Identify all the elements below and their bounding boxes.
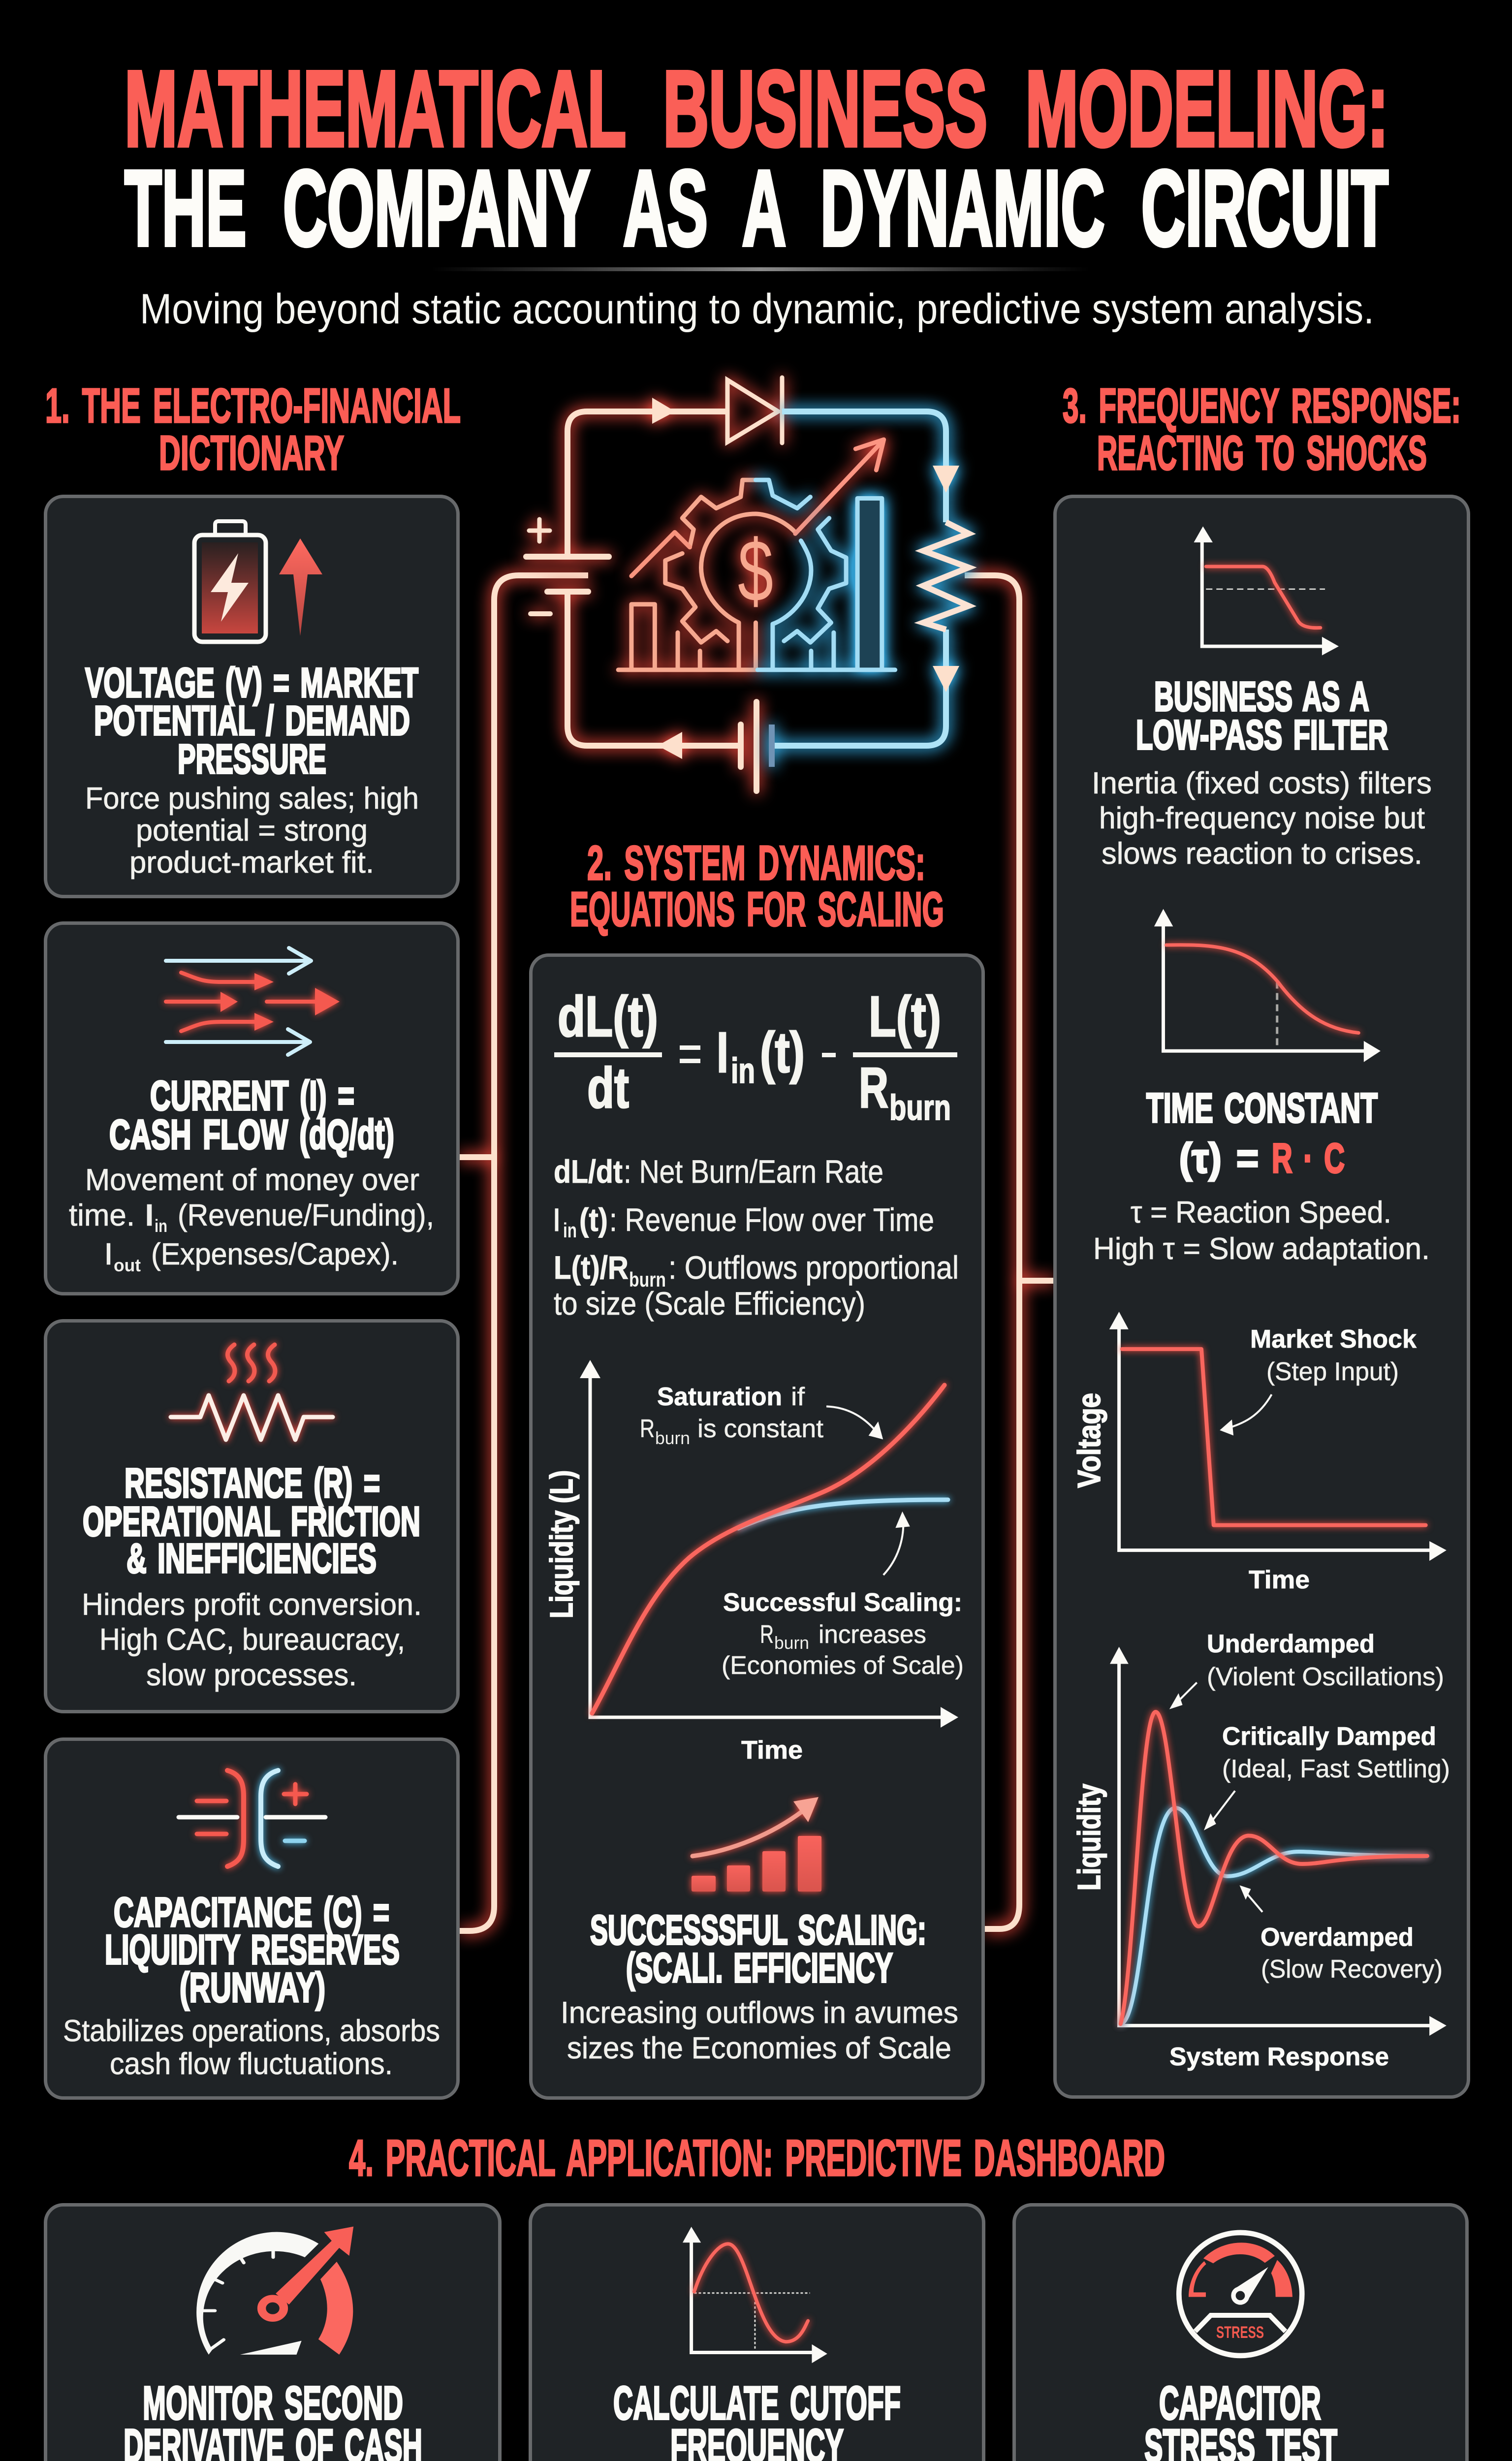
annotation: successful scaling: burn bbox=[774, 1633, 809, 1653]
annotation arrow: scaling bbox=[883, 1512, 910, 1575]
heading: monitor second derivative: MONITOR SECOND bbox=[143, 2377, 403, 2429]
heading: section 2: EQUATIONS FOR SCALING bbox=[570, 882, 944, 936]
heading: section 2 bbox=[570, 836, 944, 936]
icon: resistor bbox=[171, 1395, 333, 1440]
text: current description: (Revenue/Funding), bbox=[178, 1199, 434, 1232]
central circuit diagram bbox=[526, 378, 969, 791]
axis label: system response: System Response bbox=[1169, 2043, 1389, 2071]
heading: cutoff frequency bbox=[613, 2377, 901, 2461]
equation: (t) bbox=[760, 1020, 805, 1084]
heading: time constant: TIME CONSTANT bbox=[1146, 1085, 1378, 1131]
heading: resistance: OPERATIONAL FRICTION bbox=[83, 1498, 420, 1545]
heading: successful scaling: SUCCESSSFUL SCALING: bbox=[590, 1907, 926, 1953]
icon: cutoff chart bbox=[683, 2227, 827, 2363]
annotation arrow: saturation bbox=[826, 1406, 883, 1439]
axis label: time: Time bbox=[1249, 1566, 1310, 1594]
panel: cutoff frequency bbox=[531, 2205, 983, 2461]
heading: capacitance bbox=[105, 1889, 400, 2011]
text: resistance description: slow processes. bbox=[146, 1658, 357, 1692]
text: capacitance description bbox=[63, 2014, 440, 2081]
heading: voltage: PRESSURE bbox=[178, 736, 326, 782]
text: current description: I bbox=[145, 1199, 154, 1232]
heading: current: CASH FLOW (dQ/dt) bbox=[109, 1111, 394, 1158]
text: low-pass description: slows reaction to crises. bbox=[1102, 837, 1422, 871]
heading: cutoff frequency: CALCULATE CUTOFF bbox=[613, 2377, 901, 2429]
text: current description: (Expenses/Capex). bbox=[151, 1237, 399, 1271]
equation: in bbox=[731, 1051, 755, 1091]
text: time constant description bbox=[1093, 1196, 1430, 1266]
title bbox=[125, 49, 1388, 268]
text: capacitance description: cash flow fluctuations. bbox=[110, 2047, 393, 2081]
annotation: successful scaling: (Economies of Scale) bbox=[722, 1651, 964, 1680]
equation: L(t) bbox=[869, 984, 941, 1048]
annotation: saturation: is constant bbox=[697, 1415, 824, 1443]
chart: market shock step input bbox=[1071, 1312, 1447, 1594]
text: equation legend: burn bbox=[629, 1268, 666, 1291]
curve: underdamped bbox=[1121, 1712, 1427, 2024]
annotation: successful scaling bbox=[722, 1588, 964, 1680]
text: equation legend: I bbox=[554, 1201, 560, 1238]
equation: dt bbox=[587, 1056, 629, 1120]
chart axes bbox=[580, 1360, 958, 1728]
icon: flow arrows bbox=[166, 948, 340, 1055]
icon: heat waves bbox=[227, 1345, 275, 1381]
panel: resistance bbox=[45, 1321, 458, 1712]
text: resistance description: High CAC, bureaucracy, bbox=[99, 1623, 405, 1657]
heading: low-pass filter: LOW-PASS FILTER bbox=[1136, 712, 1388, 758]
annotation: successful scaling: increases bbox=[819, 1620, 926, 1649]
heading: section 1: DICTIONARY bbox=[159, 426, 344, 480]
axis label: voltage: Voltage bbox=[1071, 1393, 1107, 1488]
annotation: critically damped bbox=[1222, 1722, 1450, 1783]
text: voltage description: potential = strong bbox=[136, 814, 368, 848]
axis label: time: Time bbox=[741, 1736, 803, 1765]
text: scaling description bbox=[561, 1996, 958, 2065]
axis label: liquidity: Liquidity (L) bbox=[543, 1470, 579, 1618]
heading: resistance bbox=[83, 1460, 420, 1581]
curve: successful scaling bbox=[738, 1500, 948, 1528]
heading: section 1: 1. THE ELECTRO-FINANCIAL bbox=[45, 379, 461, 433]
annotation: saturation: R bbox=[640, 1415, 655, 1443]
text: low-pass description: high-frequency noise but bbox=[1099, 801, 1425, 835]
heading: capacitor stress test bbox=[1144, 2377, 1337, 2461]
annotation: successful scaling: R bbox=[760, 1620, 774, 1649]
equation bbox=[554, 984, 957, 1128]
text: voltage description: product-market fit. bbox=[129, 846, 374, 880]
icon: up arrow bbox=[279, 538, 322, 636]
heading: low-pass filter bbox=[1136, 673, 1388, 758]
panel: frequency response bbox=[1055, 496, 1469, 2097]
text: equation legend: dL/dt bbox=[554, 1153, 623, 1190]
text: voltage description bbox=[85, 782, 419, 880]
heading: resistance: & INEFFICIENCIES bbox=[126, 1535, 377, 1581]
text: time constant description: τ = Reaction Speed. bbox=[1131, 1196, 1391, 1230]
curve: saturation bbox=[592, 1385, 945, 1713]
text: scaling description: Increasing outflows in avumes bbox=[561, 1996, 958, 2030]
heading: current: CURRENT (I) = bbox=[150, 1073, 354, 1119]
text: equation legend: in bbox=[563, 1219, 577, 1242]
text: equation legend: : Revenue Flow over Time bbox=[609, 1201, 934, 1238]
icon: gear with dollar, warm half bbox=[618, 440, 884, 670]
panel: current bbox=[45, 923, 458, 1294]
axis label: liquidity: Liquidity bbox=[1071, 1784, 1107, 1891]
text: scaling description: sizes the Economies of Scale bbox=[567, 2031, 951, 2065]
heading: time constant bbox=[1146, 1085, 1378, 1181]
annotation: overdamped: (Slow Recovery) bbox=[1261, 1955, 1443, 1984]
heading: current bbox=[109, 1073, 394, 1158]
heading: successful scaling bbox=[590, 1907, 926, 1991]
annotation: critically damped: Critically Damped bbox=[1222, 1722, 1436, 1751]
heading: voltage bbox=[85, 660, 418, 782]
icon: gear and bars, cool half bbox=[756, 480, 895, 670]
heading: monitor second derivative bbox=[124, 2377, 422, 2461]
panel: capacitor stress test bbox=[1014, 2205, 1467, 2461]
icon: growth bars bbox=[692, 1797, 821, 1892]
text: current description: in bbox=[155, 1216, 167, 1236]
text: current description bbox=[69, 1163, 434, 1275]
heading: section 1 bbox=[45, 379, 461, 480]
equation: R bbox=[859, 1056, 888, 1120]
heading: low-pass filter: BUSINESS AS A bbox=[1154, 673, 1369, 720]
text: current description: out bbox=[114, 1255, 141, 1275]
heading: capacitance: CAPACITANCE (C) = bbox=[114, 1889, 389, 1935]
text: low-pass description bbox=[1092, 766, 1432, 871]
heading: section 3 bbox=[1063, 379, 1461, 480]
chart: low-pass filter bbox=[1194, 526, 1339, 656]
icon: stress gauge bbox=[1179, 2233, 1302, 2356]
heading: capacitor stress test: CAPACITOR bbox=[1159, 2377, 1321, 2429]
annotation: saturation: Saturation bbox=[657, 1383, 782, 1411]
annotation: market shock: (Step Input) bbox=[1266, 1357, 1399, 1386]
text: resistance description: Hinders profit conversion. bbox=[82, 1588, 422, 1622]
text: voltage description: Force pushing sales; high bbox=[85, 782, 419, 816]
heading: capacitance: LIQUIDITY RESERVES bbox=[105, 1926, 400, 1973]
circuit: cool wires and resistor bbox=[772, 411, 969, 767]
connecting outer wires bbox=[460, 575, 1053, 1931]
annotation: overdamped: Overdamped bbox=[1260, 1923, 1414, 1952]
text: equation legend: (t) bbox=[579, 1201, 608, 1238]
text: equation legend: : Outflows proportional bbox=[668, 1249, 959, 1286]
annotation: underdamped bbox=[1207, 1630, 1444, 1691]
text: resistance description bbox=[82, 1588, 422, 1692]
annotation: critically damped: (Ideal, Fast Settling) bbox=[1222, 1755, 1450, 1783]
heading: section 2: 2. SYSTEM DYNAMICS: bbox=[587, 836, 925, 890]
annotation: underdamped: (Violent Oscillations) bbox=[1207, 1663, 1444, 1691]
equation: dL(t) bbox=[558, 984, 658, 1048]
icon: speedometer bbox=[196, 2227, 353, 2355]
heading: capacitance: (RUNWAY) bbox=[180, 1964, 325, 2011]
panel: capacitance bbox=[45, 1739, 458, 2098]
text: current description: time. bbox=[69, 1199, 135, 1232]
text: equation legend: L(t)/R bbox=[554, 1249, 629, 1286]
heading: time constant: (τ) = bbox=[1179, 1135, 1259, 1181]
chart: liquidity over time bbox=[543, 1360, 964, 1765]
curve: critically damped bbox=[1121, 1808, 1427, 2024]
icon: battery bbox=[194, 521, 266, 642]
equation: burn bbox=[889, 1088, 951, 1128]
text: capacitance description: Stabilizes operations, absorbs bbox=[63, 2014, 440, 2048]
annotation: market shock bbox=[1250, 1325, 1417, 1386]
annotation: overdamped bbox=[1260, 1923, 1443, 1984]
text: time constant description: High τ = Slow adaptation. bbox=[1093, 1232, 1430, 1266]
heading: resistance: RESISTANCE (R) = bbox=[125, 1460, 380, 1506]
panel: system dynamics bbox=[531, 955, 983, 2098]
chart: system response bbox=[1071, 1630, 1450, 2071]
annotation: saturation bbox=[640, 1383, 824, 1448]
heading: successful scaling: (SCALI. EFFICIENCY bbox=[626, 1945, 893, 1991]
icon: stress gauge: STRESS bbox=[1216, 2323, 1264, 2342]
annotation: market shock: Market Shock bbox=[1250, 1325, 1417, 1354]
text: current description: I bbox=[105, 1237, 112, 1271]
annotation: saturation: if bbox=[791, 1383, 805, 1411]
heading: time constant: R · C bbox=[1272, 1135, 1345, 1181]
subtitle: Moving beyond static accounting to dynamic, predictive system analysis. bbox=[140, 285, 1374, 333]
chart: time constant bbox=[1154, 909, 1381, 1062]
equation: I bbox=[717, 1020, 728, 1084]
heading: voltage: VOLTAGE (V) = MARKET bbox=[85, 660, 418, 706]
annotation arrows bbox=[1169, 1682, 1262, 1912]
text: equation legend: to size (Scale Efficiency) bbox=[554, 1285, 865, 1322]
panel: voltage bbox=[45, 496, 458, 897]
icon: gear with dollar, warm half: $ bbox=[738, 522, 773, 620]
circuit: warm wires and battery bbox=[526, 378, 782, 791]
annotation: underdamped: Underdamped bbox=[1207, 1630, 1375, 1658]
annotation: saturation: burn bbox=[655, 1428, 690, 1448]
heading: voltage: POTENTIAL / DEMAND bbox=[94, 697, 410, 744]
text: equation legend: : Net Burn/Earn Rate bbox=[624, 1153, 883, 1190]
annotation: successful scaling: Successful Scaling: bbox=[723, 1588, 962, 1617]
text: current description: Movement of money over bbox=[85, 1163, 419, 1197]
text: equation legend bbox=[554, 1153, 959, 1322]
panel: monitor second derivative bbox=[45, 2205, 500, 2461]
text: low-pass description: Inertia (fixed costs) filters bbox=[1092, 766, 1432, 800]
icon: capacitor bbox=[179, 1770, 325, 1866]
